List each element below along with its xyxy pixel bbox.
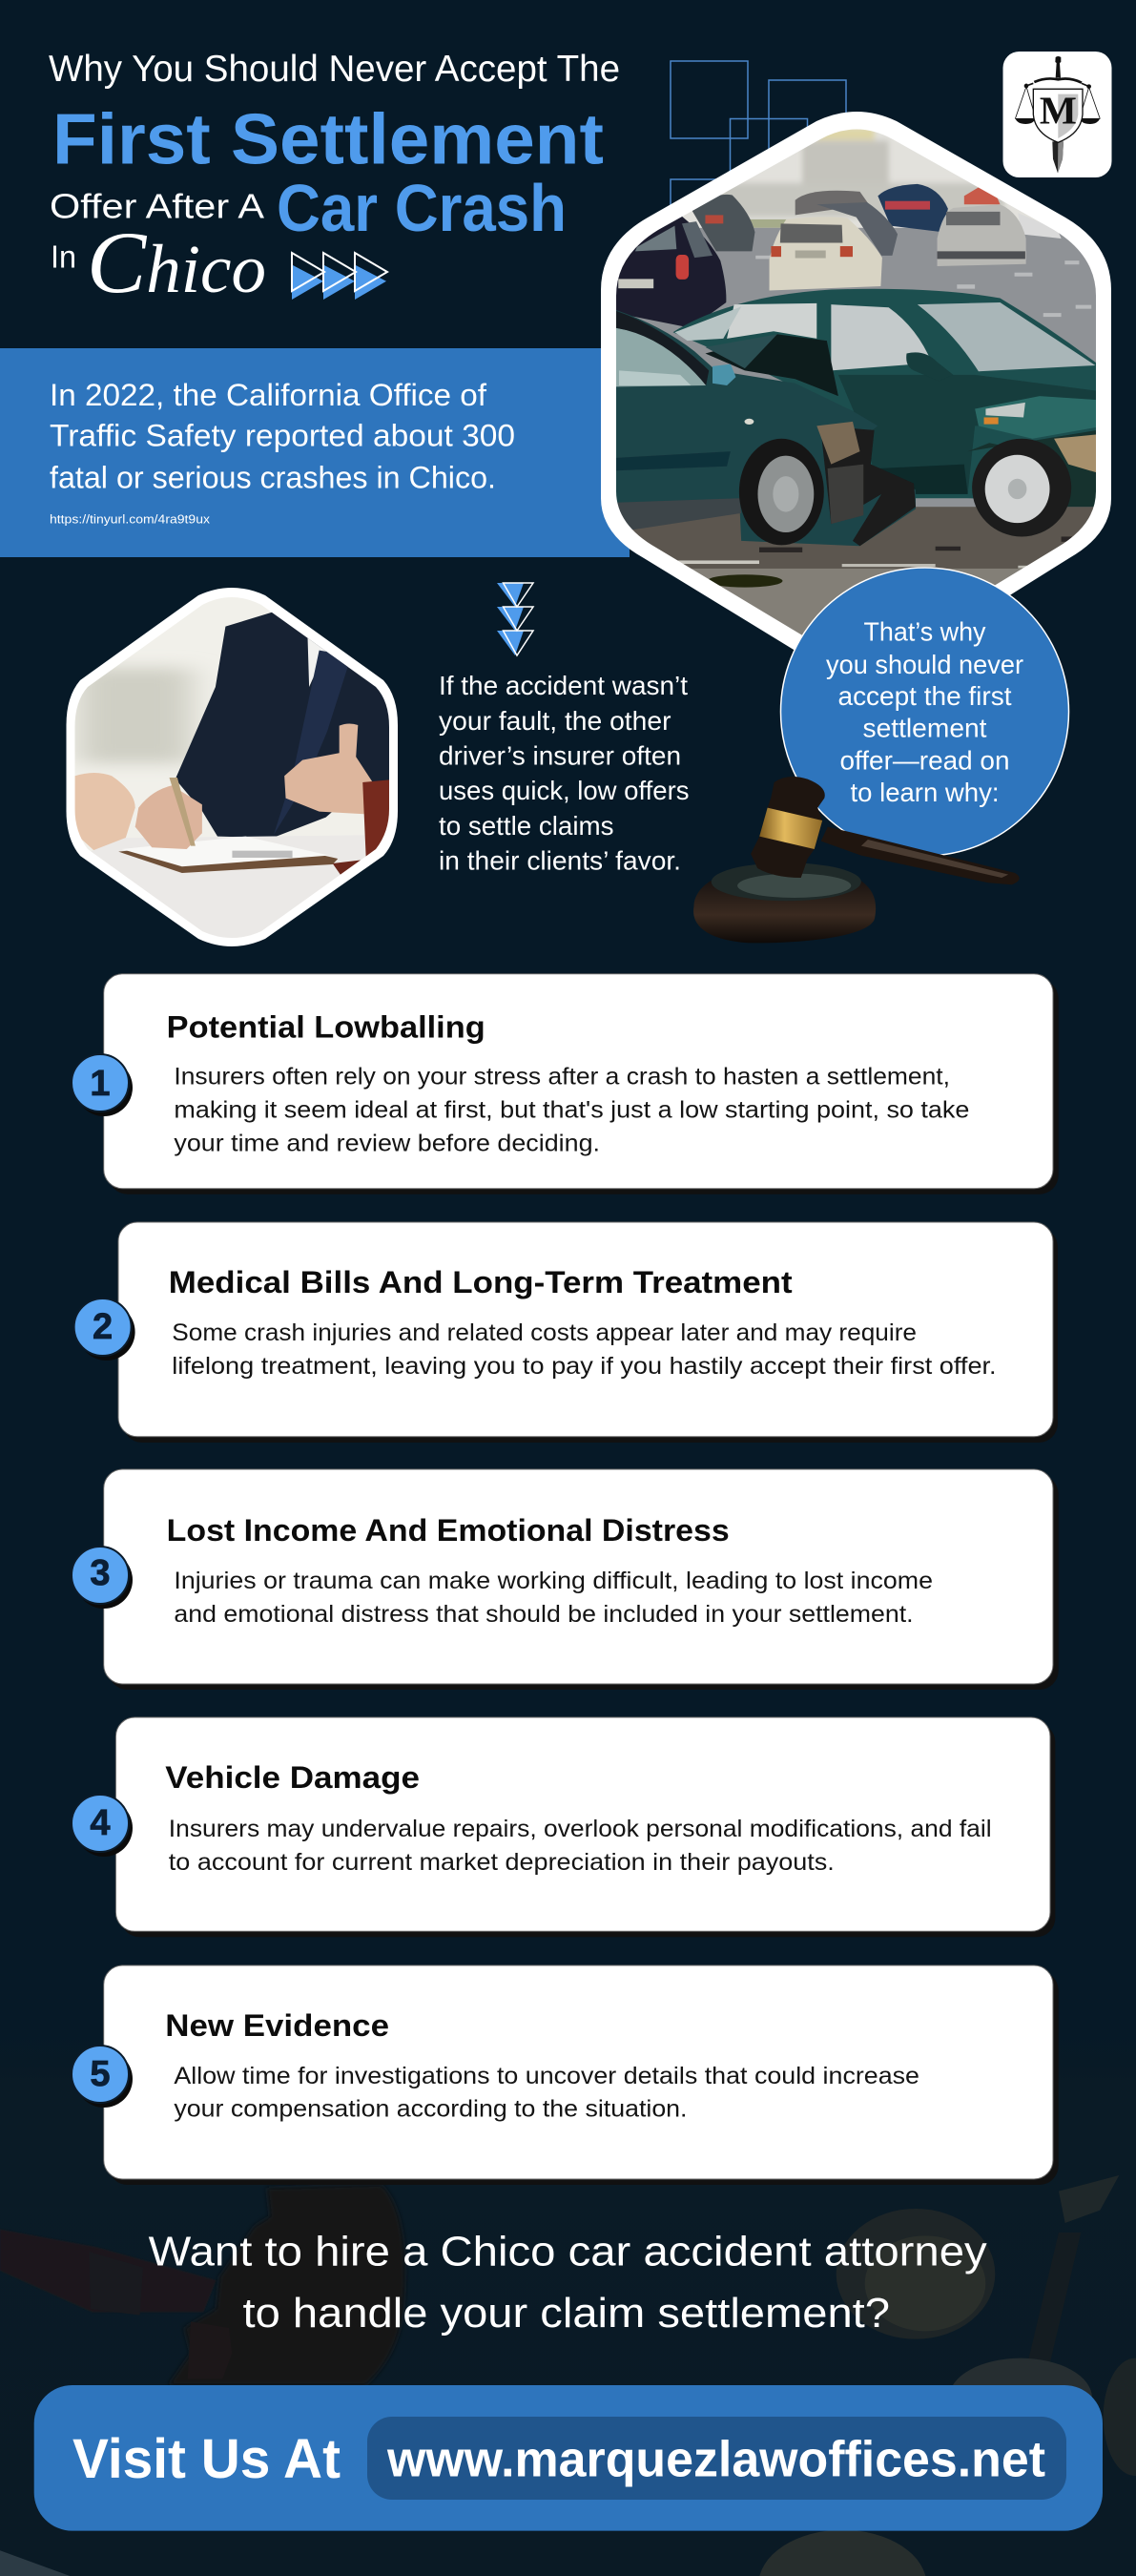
panel: step 1: making it seem ideal at first, but that's just a low starting point, so take [174,1097,969,1124]
statistic text: fatal or serious crashes in Chico. [50,461,496,495]
title: Why You Should Never Accept The [49,49,620,90]
panel: step 2 [74,1222,1058,1443]
icon: triple down arrows [497,583,533,655]
call to action question: to handle your claim settlement? [242,2290,890,2337]
callout: blue circle: That’s why [864,617,986,647]
white car [770,217,882,290]
call to action question [149,2229,987,2337]
text: insurer explanation [439,671,689,876]
panel: step 1: your time and review before deciding. [174,1131,600,1157]
icon: blade [1052,141,1064,173]
number badge 3: 3 [90,1553,111,1593]
title: Chico [87,214,266,311]
panel: step 4: Insurers may undervalue repairs, overlook personal modifications, and fail [169,1816,992,1842]
call to action question: Want to hire a Chico car accident attorney [149,2229,987,2275]
panel: step 3 [72,1469,1059,1690]
text: insurer explanation: to settle claims [439,811,614,841]
callout: blue circle: accept the first [837,681,1012,711]
logo badge [1003,52,1112,177]
number badge 5 [72,2046,133,2108]
decorative outlined squares [671,61,846,257]
panel: step 3: Lost Income And Emotional Distress [167,1513,730,1548]
faded courtroom background photo [0,2032,1136,2576]
title: Offer After A [50,187,264,225]
title [49,49,620,311]
number badge 1: 1 [90,1064,111,1104]
text: insurer explanation: driver’s insurer often [439,741,681,771]
front car body [616,310,916,546]
icon: sword [1055,56,1061,78]
statistic band [0,348,630,557]
photo: attorney in white hexagon [65,585,400,951]
panel: step 3: and emotional distress that should be included in your settlement. [174,1601,914,1628]
title: First Settlement [52,99,604,179]
text: insurer explanation: your fault, the other [439,706,671,736]
panel: step 2: lifelong treatment, leaving you to pay if you hastily accept their first offer. [172,1353,997,1380]
road debris [759,536,1078,552]
panel: step 5 [72,1965,1059,2185]
statistic text: https://tinyurl.com/4ra9t9ux [50,511,211,527]
panel: step 4: to account for current market depreciation in their payouts. [169,1849,835,1876]
callout: blue circle: you should never [826,650,1023,679]
number badge 1 [72,1054,133,1116]
icon: triple right arrows [292,253,387,300]
text: insurer explanation: If the accident wasn’t [439,671,688,700]
panel: step 4: Vehicle Damage [165,1760,420,1795]
panel: step 1: Insurers often rely on your stress after a crash to hasten a settlement, [174,1064,950,1091]
panel: visit us banner [34,2385,1103,2531]
panel: step 1: Potential Lowballing [167,1009,485,1044]
callout: blue circle: settlement [862,714,987,743]
website pill [367,2417,1066,2500]
green car body [673,289,1101,503]
panel: step 3: Injuries or trauma can make working difficult, leading to lost income [174,1568,933,1594]
icon: scales crossbar [1034,78,1082,83]
panel: step 2: Some crash injuries and related costs appear later and may require [172,1319,917,1346]
background cars [691,184,1062,266]
statistic text: In 2022, the California Office of [50,378,486,412]
icon: gavel [693,777,1020,943]
title: In [51,239,76,275]
number badge 2: 2 [93,1307,113,1347]
dark car left [616,217,726,328]
callout: blue circle [780,568,1068,856]
panel: step 2: Medical Bills And Long-Term Treatment [169,1265,793,1299]
panel: step 5: your compensation according to the situation. [174,2096,687,2123]
panel: step 5: New Evidence [165,2008,389,2043]
panel: step 5: Allow time for investigations to uncover details that could increase [174,2063,919,2089]
panel: step 1 [72,974,1059,1195]
callout: blue circle: offer—read on [839,746,1009,776]
title: Car Crash [277,171,567,245]
statistic text: Traffic Safety reported about 300 [50,419,515,453]
number badge 4: 4 [90,1803,111,1843]
text: insurer explanation: in their clients’ favor. [439,846,681,876]
number badge 3 [72,1547,133,1609]
panel: step 4 [72,1717,1055,1937]
number badge 4 [72,1795,133,1857]
front car wheel [739,439,824,545]
icon: letter M: M [1040,88,1077,132]
crumpled hood [705,334,838,396]
callout: blue circle: to learn why: [851,778,1000,807]
number badge 5: 5 [90,2054,111,2094]
green car right wheel [972,439,1071,536]
icon: shield [1033,89,1083,142]
number badge 2 [74,1298,135,1361]
statistic text [50,378,515,527]
panel: visit us banner: Visit Us At [72,2428,341,2490]
website pill: www.marquezlawoffices.net [386,2431,1045,2488]
text: insurer explanation: uses quick, low offers [439,776,689,805]
crash debris [820,426,916,546]
photo: car crash in white hexagon [601,112,1111,651]
